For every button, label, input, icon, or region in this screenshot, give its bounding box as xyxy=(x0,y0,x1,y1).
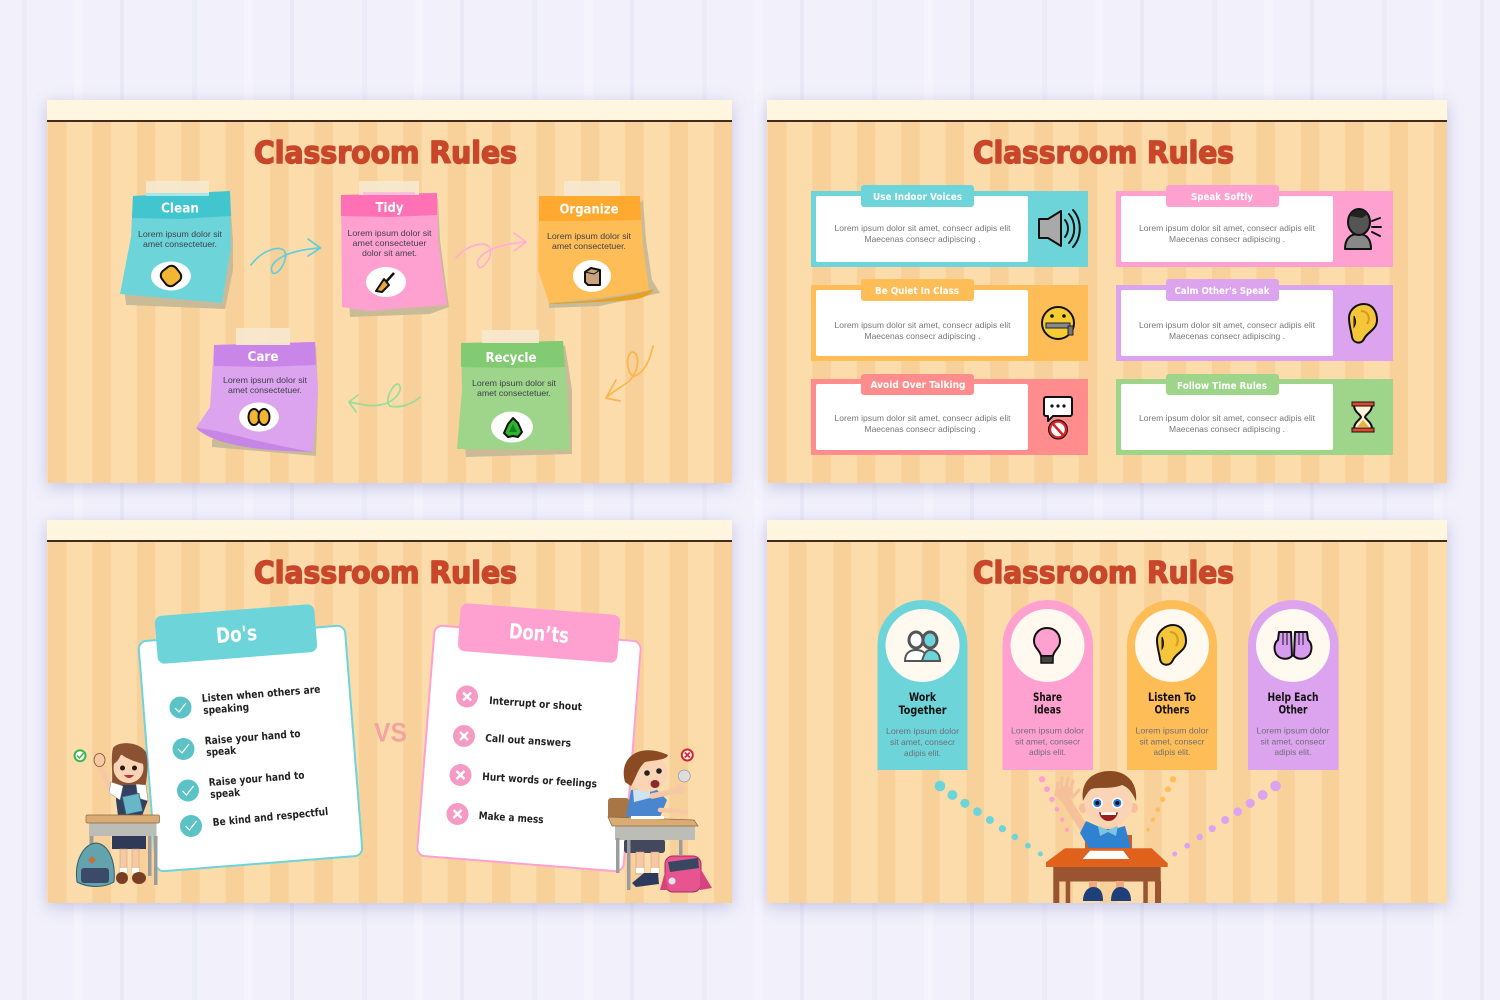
icon: ear xyxy=(1349,304,1377,343)
note: Recycle: Recycle xyxy=(486,351,537,366)
arrow: teal xyxy=(251,239,320,273)
card: don'ts: Don’ts xyxy=(508,619,570,648)
note: Clean: amet consectetuer. xyxy=(143,239,217,249)
arch: Help Each Other: sit amet, consecr xyxy=(1260,736,1326,746)
card: Use Indoor Voices xyxy=(811,185,1088,267)
card: Speak Softly: Speak Softly xyxy=(1191,192,1253,203)
title: Classroom Rules xyxy=(973,136,1234,171)
note: Care: Care xyxy=(248,350,279,365)
dotted path: pink xyxy=(1039,776,1069,832)
illustration: boy throwing paper xyxy=(608,750,712,892)
icon: light bulb xyxy=(1034,628,1060,663)
note: Organize: Lorem ipsum dolor sit xyxy=(547,231,632,241)
illustration: boy at desk xyxy=(1046,771,1168,903)
cross item 2 xyxy=(453,725,571,750)
arrow: pink xyxy=(456,233,526,267)
arch: Listen To Others: adipis elit. xyxy=(1154,747,1190,757)
card: Avoid Over Talking: Lorem ipsum dolor sit amet, consecr adipis elit xyxy=(834,413,1011,423)
icon: open hands xyxy=(1275,632,1311,659)
card: Be Quiet In Class: Maecenas consecr adipiscing . xyxy=(864,331,980,341)
card: Follow Time Rules: Maecenas consecr adipiscing . xyxy=(1169,424,1285,434)
note: Tidy: Lorem ipsum dolor sit xyxy=(348,228,432,238)
dotted path: purple xyxy=(1172,781,1281,856)
arch: Work Together: Together xyxy=(898,703,947,717)
dotted path: orange xyxy=(1146,776,1176,832)
cross item 2: Call out answers xyxy=(485,733,571,750)
arch: Share Ideas: Lorem ipsum dolor xyxy=(1011,726,1084,736)
cross item 4 xyxy=(446,803,544,826)
arrow: orange xyxy=(606,346,653,401)
arch: Work Together xyxy=(878,600,968,770)
note: Organize: Organize xyxy=(560,202,619,218)
note: Tidy xyxy=(341,181,449,317)
check item 3 xyxy=(177,769,305,802)
arch: Share Ideas: Share xyxy=(1033,690,1062,704)
arch: Help Each Other xyxy=(1248,600,1338,770)
icon: two people xyxy=(905,632,940,661)
card: Use Indoor Voices: Lorem ipsum dolor sit amet, consecr adipis elit xyxy=(834,223,1011,233)
cross item 3 xyxy=(450,764,597,790)
icon: zipper face xyxy=(1042,307,1074,339)
card: Be Quiet In Class xyxy=(811,279,1088,361)
cross item 3: Hurt words or feelings xyxy=(482,771,597,790)
arrow: green xyxy=(349,384,420,412)
check item 2: speak xyxy=(206,745,238,759)
card: do's xyxy=(138,604,363,872)
arch: Share Ideas: Ideas xyxy=(1034,702,1061,716)
illustration: girl at desk xyxy=(74,743,160,886)
arch: Listen To Others: Others xyxy=(1154,702,1190,716)
dotted path: teal xyxy=(935,781,1043,856)
card: don'ts xyxy=(417,603,641,872)
panel: voice rules xyxy=(767,100,1447,483)
note: Clean: Clean xyxy=(161,202,199,216)
card: Follow Time Rules: Lorem ipsum dolor sit amet, consecr adipis elit xyxy=(1139,413,1316,423)
icon: box xyxy=(585,268,600,285)
arch: Share Ideas: sit amet, consecr xyxy=(1015,736,1080,746)
note: Tidy: dolor sit amet. xyxy=(362,248,417,258)
arch: Listen To Others: sit amet, consecr xyxy=(1140,736,1205,746)
arch: Share Ideas: adipis elit. xyxy=(1029,747,1066,757)
card: Be Quiet In Class: Be Quiet In Class xyxy=(875,286,959,297)
note: Care: amet consectetuer. xyxy=(228,385,302,395)
note: Organize xyxy=(538,181,660,308)
check item 1: speaking xyxy=(203,701,250,717)
card: do's: Do's xyxy=(215,621,258,648)
card: Follow Time Rules: Follow Time Rules xyxy=(1177,381,1267,392)
card: Calm Other's Speak xyxy=(1116,279,1393,361)
icon: no talking xyxy=(1044,397,1072,439)
arch: Help Each Other: Lorem ipsum dolor xyxy=(1256,726,1330,736)
check item 2 xyxy=(172,728,301,760)
icon: speaking person xyxy=(1345,209,1381,249)
note: Organize: amet consectetuer. xyxy=(552,241,626,251)
title: Classroom Rules xyxy=(973,556,1234,591)
arch: Work Together: adipis elit. xyxy=(904,748,941,758)
note: Recycle: amet consectetuer. xyxy=(477,388,551,398)
check item 1: Listen when others are xyxy=(201,684,321,705)
note: Tidy: amet consectetuer xyxy=(352,238,427,248)
card: Use Indoor Voices: Use Indoor Voices xyxy=(873,192,962,203)
note: Care: Lorem ipsum dolor sit xyxy=(223,375,308,385)
check item 3: Raise your hand to xyxy=(208,769,305,789)
icon: ear xyxy=(1157,625,1186,665)
arch: Work Together: Lorem ipsum dolor xyxy=(886,726,959,736)
card: Use Indoor Voices: Maecenas consecr adipiscing . xyxy=(864,234,980,244)
icon: hourglass xyxy=(1352,402,1374,432)
card: Calm Other's Speak: Lorem ipsum dolor sit amet, consecr adipis elit xyxy=(1139,320,1316,330)
VS label: VS xyxy=(374,718,407,748)
arch: Share Ideas xyxy=(1002,600,1093,770)
note: Clean xyxy=(120,181,233,309)
icon: recycle xyxy=(504,418,522,437)
card: Be Quiet In Class: Lorem ipsum dolor sit amet, consecr adipis elit xyxy=(834,320,1011,330)
note: Clean: Lorem ipsum dolor sit xyxy=(138,229,223,239)
arch: Listen To Others: Listen To xyxy=(1148,690,1196,704)
cross item 1: Interrupt or shout xyxy=(489,695,582,713)
icon: hands xyxy=(248,409,270,425)
card: Speak Softly: Maecenas consecr adipiscing . xyxy=(1169,234,1285,244)
note: Recycle xyxy=(457,330,572,457)
check item 4 xyxy=(180,806,329,837)
cross item 4: Make a mess xyxy=(478,810,544,826)
panel: sticky notes process xyxy=(47,100,732,483)
arch: Listen To Others: Lorem ipsum dolor xyxy=(1136,726,1209,736)
arch: Work Together: Work xyxy=(909,690,936,704)
arch: Help Each Other: Other xyxy=(1278,702,1308,716)
arch: Work Together: sit amet, consecr xyxy=(890,737,955,747)
arch: Help Each Other: adipis elit. xyxy=(1274,747,1312,757)
card: Speak Softly xyxy=(1116,185,1393,267)
arch: Listen To Others xyxy=(1127,600,1217,770)
cross item 1 xyxy=(456,686,582,713)
card: Avoid Over Talking xyxy=(811,374,1088,455)
card: Avoid Over Talking: Avoid Over Talking xyxy=(870,380,966,391)
title: Classroom Rules xyxy=(254,136,517,171)
card: Follow Time Rules xyxy=(1116,374,1393,455)
icon: broom xyxy=(376,273,394,292)
card: Calm Other's Speak: Calm Other's Speak xyxy=(1174,286,1270,297)
check item 2: Raise your hand to xyxy=(204,728,301,747)
icon: speaker xyxy=(1039,210,1080,247)
note: Recycle: Lorem ipsum dolor sit xyxy=(472,378,557,388)
icon: sponge xyxy=(158,263,184,289)
card: Speak Softly: Lorem ipsum dolor sit amet, consecr adipis elit xyxy=(1139,223,1316,233)
card: Avoid Over Talking: Maecenas consecr adipiscing . xyxy=(864,424,980,434)
panel: arches with boy xyxy=(767,520,1447,903)
title: Classroom Rules xyxy=(254,556,517,591)
check item 1 xyxy=(170,684,321,718)
arch: Help Each Other: Help Each xyxy=(1268,690,1318,704)
panel: do's and don'ts xyxy=(47,520,732,903)
check item 4: Be kind and respectful xyxy=(212,806,329,829)
note: Tidy: Tidy xyxy=(376,201,404,216)
note: Care xyxy=(196,328,318,456)
check item 3: speak xyxy=(210,787,242,801)
card: Calm Other's Speak: Maecenas consecr adipiscing . xyxy=(1169,331,1285,341)
